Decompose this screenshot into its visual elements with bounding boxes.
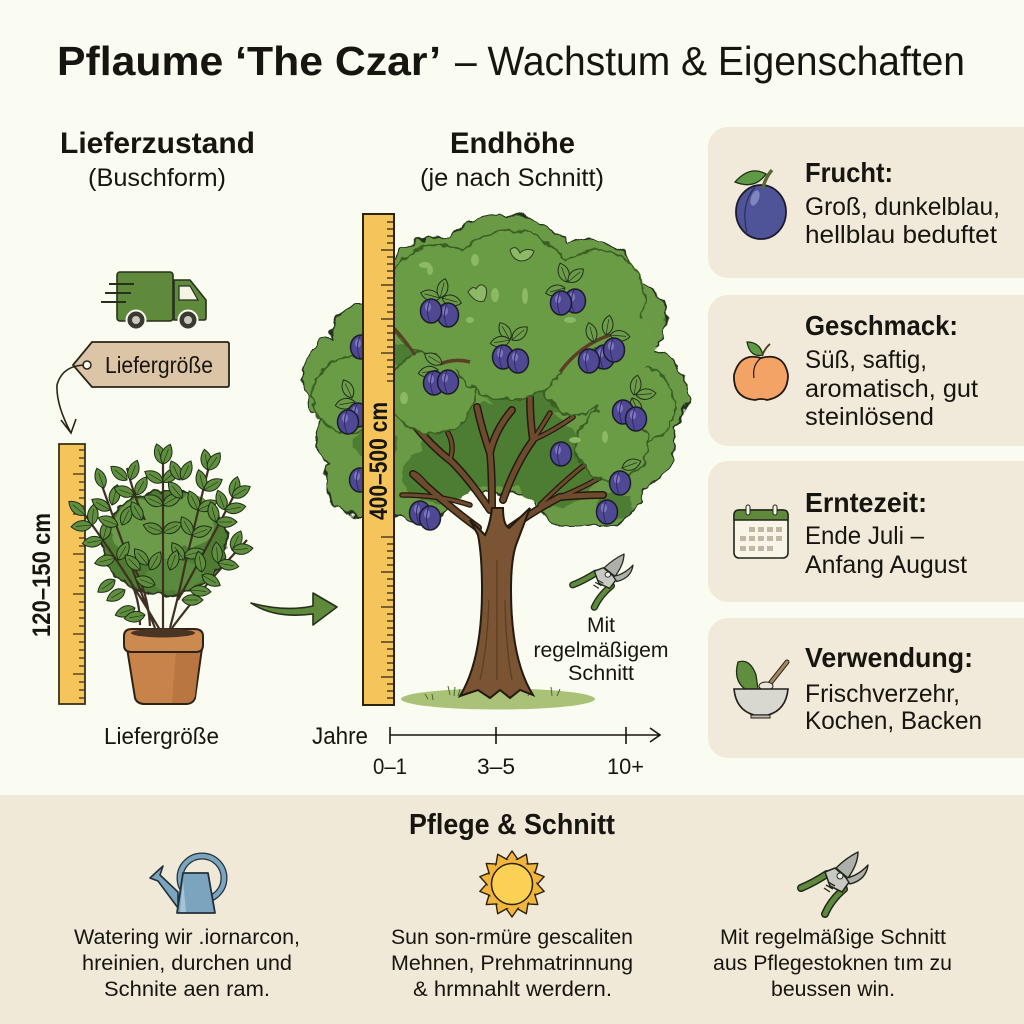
text: pruning: beussen win. (771, 978, 895, 1001)
heading: Pflege & Schnitt: Pflege & Schnitt (409, 809, 615, 841)
timeline: Jahre: 10+ (607, 754, 644, 779)
panel: Erntezeit: Anfang August (805, 551, 967, 579)
arrow: growth (251, 593, 337, 625)
text: watering: hreinien, durchen und (82, 952, 292, 975)
canopy front blend (388, 248, 655, 418)
icon: sun (478, 851, 546, 917)
text: sun: Mehnen, Prehmatrinnung (391, 952, 633, 975)
large ruler (363, 214, 394, 705)
canopy fill (303, 215, 687, 525)
panel: Geschmack (708, 295, 1024, 446)
icon: watering can (150, 856, 224, 913)
terracotta pot (124, 628, 203, 704)
icon: pruning shears (801, 852, 868, 914)
panel: Geschmack: steinlösend (805, 403, 934, 431)
panel: Verwendung: Frischverzehr, (805, 680, 960, 708)
plum clusters (334, 261, 656, 530)
heading: Endhöhe: Endhöhe (450, 127, 575, 160)
small ruler (59, 444, 85, 704)
tag: Liefergröße (73, 342, 229, 387)
text: watering: Watering wir .iornarcon, (74, 926, 300, 949)
text: watering: Schnite aen ram. (104, 978, 270, 1001)
panel: Frucht: Groß, dunkelblau, (805, 193, 1000, 221)
trunk (460, 508, 533, 698)
bush leaves (66, 442, 253, 624)
text: pruning: aus Pflegestoknen tım zu (713, 952, 952, 975)
timeline: Jahre (312, 723, 660, 779)
heading: Lieferzustand: (Buschform) (88, 164, 226, 192)
heading: Endhöhe (420, 127, 604, 192)
branches (402, 397, 612, 528)
note: regular pruning (534, 614, 668, 685)
timeline: Jahre: 0–1 (373, 754, 407, 779)
title: – Wachstum & Eigenschaften (455, 38, 965, 84)
canopy shaded interior (353, 341, 633, 519)
grass ground (401, 686, 595, 710)
panel: Erntezeit: Ende Juli – (805, 522, 924, 550)
heading: Endhöhe: (je nach Schnitt) (420, 164, 604, 192)
heading: Lieferzustand (60, 127, 255, 192)
canopy outline (303, 215, 687, 525)
icon: peach (734, 342, 788, 400)
title (57, 38, 965, 84)
panel: Erntezeit (708, 461, 1024, 602)
icon: plum (735, 170, 786, 239)
label: Liefergröße under pot: Liefergröße (104, 723, 219, 749)
canopy front clumps (312, 230, 675, 481)
bush foliage ball (103, 491, 227, 595)
panel: Geschmack: Geschmack: (805, 310, 958, 341)
panel: Verwendung: Verwendung: (805, 642, 973, 673)
text: watering (74, 926, 300, 1001)
plum tree (303, 215, 687, 710)
bush in pot (66, 442, 253, 704)
note: regular pruning: Schnitt (568, 662, 634, 685)
tag: Liefergröße: Liefergröße (105, 352, 213, 378)
panel: Pflege & Schnitt (0, 795, 1024, 1024)
panel: Erntezeit: Erntezeit: (805, 487, 927, 518)
panel: Geschmack: Süß, saftig, (805, 346, 927, 374)
note: regular pruning: regelmäßigem (534, 639, 668, 662)
text: sun (391, 926, 633, 1001)
arrow: tag to ruler (57, 365, 84, 433)
icon: calendar (734, 505, 788, 558)
heading: Lieferzustand: Lieferzustand (60, 127, 255, 160)
panel: Verwendung: Kochen, Backen (805, 707, 982, 735)
note: regular pruning: Mit (587, 614, 615, 637)
panel: Frucht (708, 127, 1024, 278)
panel: Geschmack: aromatisch, gut (805, 375, 978, 403)
icon: pruning shears small (573, 554, 633, 607)
text: pruning (713, 926, 952, 1001)
icon: bowl with leaf and spoon (734, 661, 788, 718)
text: pruning: Mit regelmäßige Schnitt (720, 926, 946, 949)
large ruler: 400–500 cm (365, 402, 393, 520)
title: Pflaume ‘The Czar’ (57, 38, 441, 84)
panel: Verwendung (708, 618, 1024, 758)
text: sun: Sun son-rmüre gescaliten (391, 926, 633, 949)
text: sun: & hrmnahlt werdern. (413, 978, 612, 1001)
panel: Frucht: Frucht: (805, 157, 893, 188)
canopy highlights (400, 248, 608, 443)
timeline: Jahre: 3–5 (477, 754, 515, 779)
panel: Frucht: hellblau beduftet (805, 221, 997, 249)
icon: delivery truck (101, 272, 206, 330)
bush stems (85, 450, 247, 630)
timeline: Jahre: Jahre (312, 723, 368, 750)
ruler label: 120–150 cm: 120–150 cm (28, 513, 56, 637)
